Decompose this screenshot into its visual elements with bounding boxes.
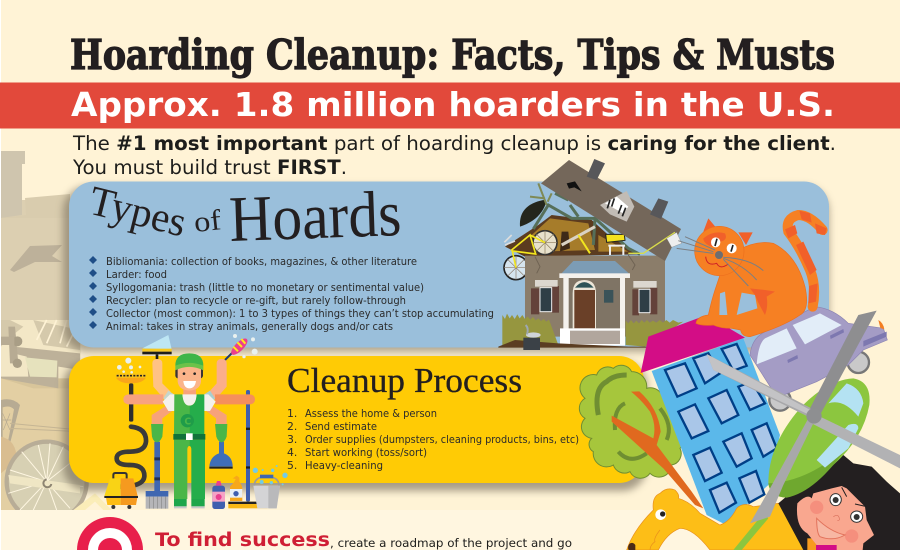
panel: cleanup process [63,356,647,491]
icon: orange cat [677,211,827,337]
icon: blue building [652,338,780,524]
house wall [525,256,665,337]
list: cleanup steps: 3. [287,433,297,446]
intro text: You must build trust FIRST. [72,156,347,179]
icon: yellow camel [627,489,807,550]
list: cleanup steps: 2. [287,420,297,433]
text: to find success: , create a roadmap of the project and go [330,536,572,550]
list: hoard types [89,255,494,333]
heading: types of hoards: of [192,204,223,239]
heading: cleanup process: Cleanup Process [287,361,522,400]
list: hoard types: Animal: takes in stray animals, generally dogs and/or cats [106,320,393,333]
icon: child with black hair [778,455,900,550]
list: cleanup steps: Assess the home & person [305,407,437,420]
heading: types of hoards [85,178,402,256]
yard with grass and goose [502,314,558,345]
list: cleanup steps: 4. [287,446,297,459]
icon: worker with cleaning tools [104,334,288,509]
panel: types of hoards [63,178,829,352]
icon: worker with cleaning tools: C [184,416,191,427]
icon: collapsing house with clutter [498,159,683,350]
icon: purple car [750,307,887,411]
banner: hoarder statistic [0,82,900,128]
roof [541,160,681,261]
list: hoard types: Syllogomania: trash (little to no monetary or sentimental value) [106,281,424,294]
list: cleanup steps: 1. [287,407,297,420]
list: cleanup steps: Order supplies (dumpsters, cleaning products, bins, etc) [305,433,579,446]
list: cleanup steps: Send estimate [305,420,377,433]
list: hoard types: Larder: food [106,268,167,281]
banner: hoarder statistic: Approx. 1.8 million hoarders in the U.S. [71,85,835,124]
intro text: The #1 most important part of hoarding cleanup is caring for the client. [72,132,836,155]
list: cleanup steps: Start working (toss/sort) [305,446,427,459]
list: cleanup steps [287,407,579,472]
icon: propeller [707,311,900,523]
icon: tree [579,365,703,508]
icon: target [77,517,143,550]
list: cleanup steps: Heavy-cleaning [305,459,383,472]
icon: magenta roof [641,315,745,373]
list: hoard types: Collector (most common): 1 to 3 types of things they can’t stop accumulating [106,307,494,320]
list: hoard types: Bibliomania: collection of books, magazines, & other literature [106,255,417,268]
text: to find success [155,530,572,550]
heading: types of hoards: Types [85,178,191,246]
illustration: tumbling pile of objects [579,211,900,550]
list: hoard types: Recycler: plan to recycle or re-gift, but rarely follow-through [106,294,406,307]
heading: types of hoards: Hoards [228,178,402,256]
list: cleanup steps: 5. [287,459,297,472]
icon: green aircraft [707,311,900,523]
intro text [72,132,836,179]
